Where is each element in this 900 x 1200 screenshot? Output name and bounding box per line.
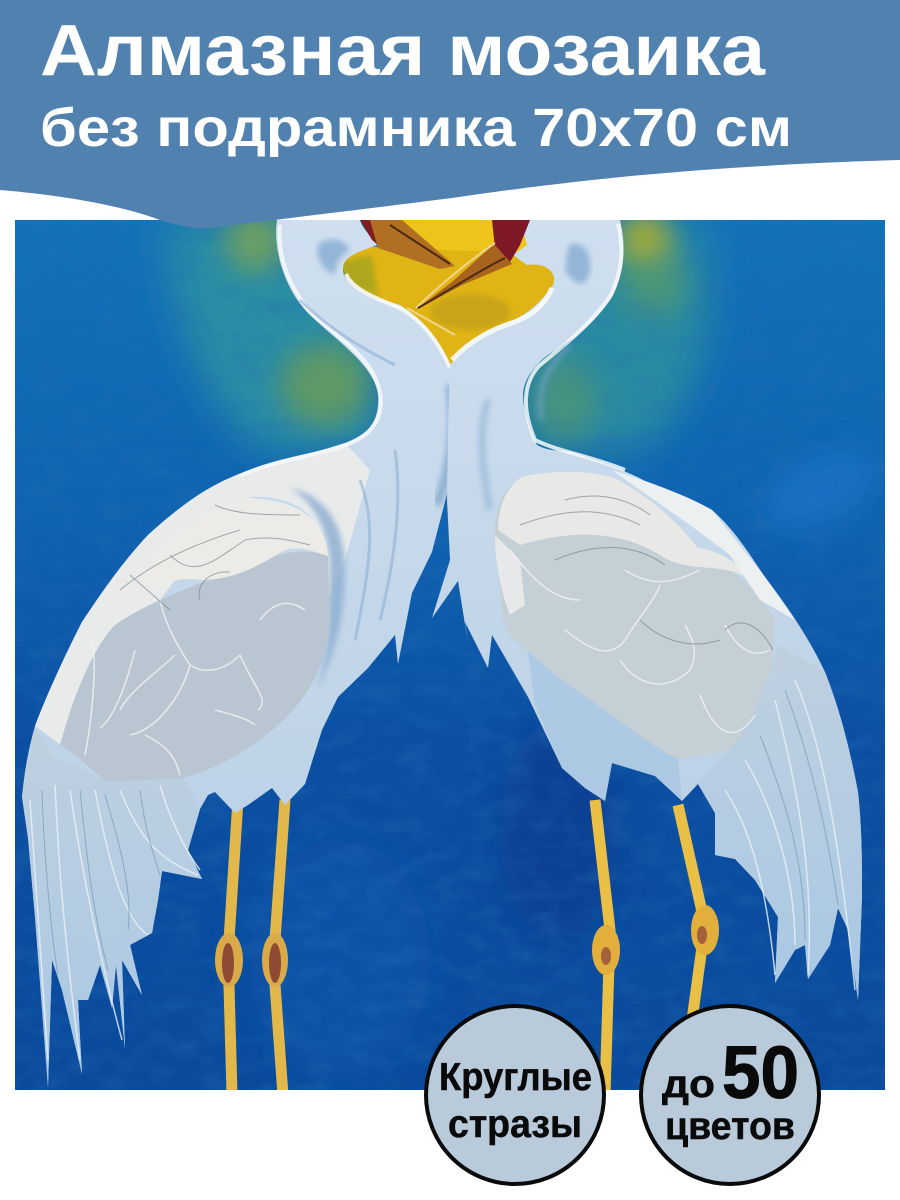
painted blue background <box>15 220 888 1090</box>
left crane body and neck <box>22 220 457 1087</box>
left crane legs <box>229 800 285 1095</box>
left wing shadow band <box>290 488 345 690</box>
right crane neck shading <box>526 224 625 470</box>
right crane long feathers <box>698 645 862 1000</box>
left crane tail <box>22 726 202 1087</box>
left crane neck shading <box>240 225 381 476</box>
right crane body and neck <box>432 220 862 1000</box>
painting: two white cranes on blue background <box>15 208 888 1095</box>
badge: up to 50 colours <box>641 1006 819 1184</box>
right crane wing <box>495 472 775 759</box>
right crane <box>432 220 862 1095</box>
badge: round rhinestones <box>426 1006 604 1184</box>
right tail feather strokes <box>725 680 855 990</box>
badge: round rhinestones: стразы <box>448 1103 582 1146</box>
left wing scallops <box>85 600 305 775</box>
left wing upper feathers <box>174 498 328 580</box>
left crane white shoulder <box>35 443 370 744</box>
badge: up to 50 colours: до <box>662 1063 715 1106</box>
yellow heart sun <box>343 220 554 364</box>
top banner <box>0 0 900 229</box>
left wing dark creases <box>120 505 310 610</box>
right crane blue underbody <box>528 651 682 801</box>
subtitle: без подрамника 70х70 см <box>40 98 792 158</box>
left crane knees <box>215 933 288 987</box>
beak lines <box>407 243 495 335</box>
right beak red base <box>492 220 530 262</box>
right beak <box>414 244 512 311</box>
right crane knees <box>592 905 719 975</box>
badge: round rhinestones: Круглые <box>439 1056 592 1099</box>
left beak red base <box>360 220 378 245</box>
left tail feather strokes <box>30 785 200 1060</box>
right crane legs <box>595 800 705 1095</box>
badge: up to 50 colours: цветов <box>665 1105 795 1148</box>
right wing white upper <box>498 472 752 580</box>
left wing grey feathers <box>60 552 330 782</box>
green-yellow patches behind necks <box>225 208 687 442</box>
badge: up to 50 colours: 50 <box>722 1031 799 1114</box>
right wing dark creases <box>520 496 773 650</box>
right shoulder strip <box>612 470 795 620</box>
right wing white lower edge <box>495 535 525 615</box>
left beak <box>370 220 455 269</box>
left crane <box>22 220 457 1095</box>
title: Алмазная мозаика <box>40 11 766 91</box>
crossed beaks <box>360 220 530 335</box>
right wing scallops <box>510 550 770 732</box>
